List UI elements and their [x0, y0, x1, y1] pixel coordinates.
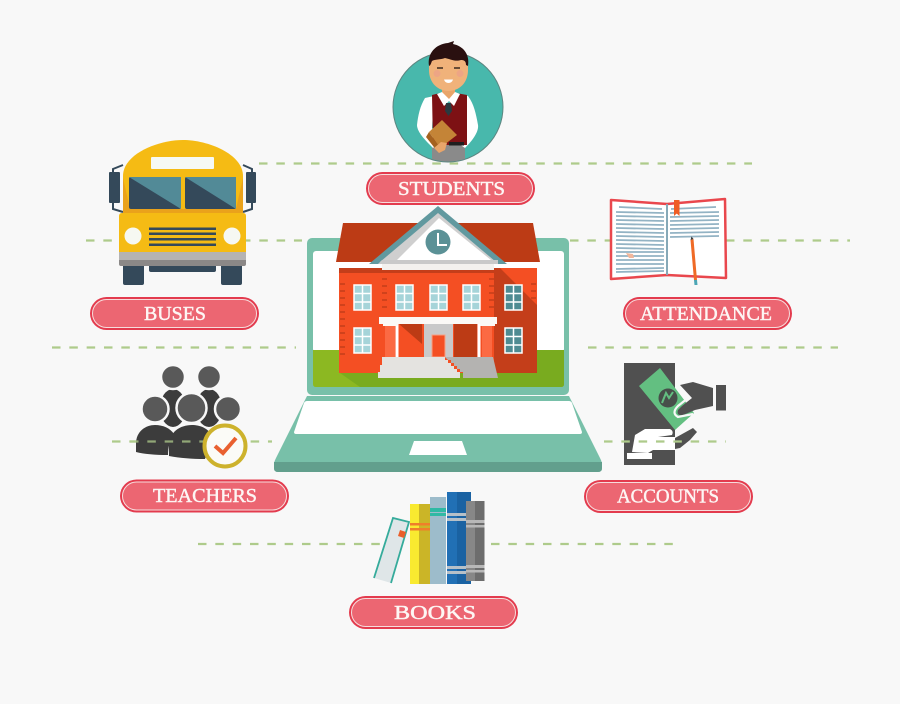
wheels	[123, 262, 242, 285]
lower hand	[632, 429, 675, 453]
pill: accounts	[584, 480, 753, 513]
face	[429, 58, 468, 91]
icon: teachers group	[130, 365, 246, 466]
pill: attendance: ATTENDANCE	[640, 303, 772, 325]
portico	[379, 317, 497, 357]
pencil	[690, 239, 697, 280]
headlights	[124, 228, 142, 244]
laptop screen frame	[307, 238, 569, 395]
neck	[442, 85, 455, 100]
note emblem	[658, 388, 678, 408]
upper hand	[678, 382, 713, 415]
pediment	[369, 206, 507, 264]
side mirrors	[109, 165, 256, 212]
lower cuff	[627, 453, 652, 459]
check badge	[204, 426, 246, 466]
pill: buses: BUSES	[144, 303, 206, 325]
pill: students	[366, 172, 535, 205]
stairs	[378, 357, 460, 378]
pill: students: STUDENTS	[398, 178, 505, 200]
pill: teachers: TEACHERS	[153, 485, 257, 507]
cuff	[716, 385, 726, 410]
windscreens	[129, 177, 236, 209]
eyes	[437, 67, 460, 69]
dark panel	[624, 363, 675, 465]
grey book	[466, 501, 484, 581]
icon: student	[393, 41, 503, 162]
grille	[149, 228, 216, 246]
illustration: school building	[336, 206, 540, 378]
tie	[445, 103, 452, 116]
bumper	[119, 252, 246, 261]
centre body	[169, 425, 212, 459]
walls	[339, 268, 537, 373]
smile	[444, 80, 453, 83]
pill: accounts: ACCOUNTS	[617, 486, 719, 508]
laptop base	[274, 396, 602, 472]
pill: books: BOOKS	[394, 602, 476, 624]
upper body	[123, 140, 243, 216]
shirt collar	[437, 92, 460, 106]
pill: attendance	[623, 297, 792, 330]
heads	[142, 365, 241, 423]
held book	[429, 120, 457, 148]
open book pages	[611, 199, 726, 279]
keyboard	[294, 401, 582, 434]
light blue book	[430, 497, 446, 584]
red vest	[432, 93, 467, 145]
icon: accounts hand and money	[604, 363, 726, 465]
eraser smudge	[626, 253, 634, 258]
brick marks	[340, 279, 536, 354]
finger outline	[674, 398, 693, 417]
icon: stack of books	[374, 492, 484, 584]
spine	[666, 204, 668, 275]
cheeks	[434, 70, 440, 77]
left text lines	[616, 207, 664, 272]
trackpad	[409, 441, 467, 455]
icon: school bus	[109, 140, 256, 285]
bookmark	[674, 200, 680, 216]
lower hand fingers	[675, 428, 697, 449]
hair	[429, 41, 468, 66]
clock	[426, 230, 450, 254]
left body	[136, 425, 174, 455]
shirt sleeves	[417, 95, 478, 148]
back row bodies	[160, 389, 222, 427]
banknote	[639, 368, 694, 430]
blue book	[447, 492, 471, 584]
pill: teachers	[120, 480, 289, 512]
roof sign	[151, 157, 214, 169]
pill: books	[349, 596, 518, 629]
cornice	[382, 264, 494, 270]
right text lines	[670, 207, 719, 237]
icon: attendance book	[611, 199, 726, 285]
windows	[354, 285, 522, 353]
teal circle	[393, 52, 503, 162]
icon: laptop	[274, 238, 602, 472]
belt	[449, 142, 464, 146]
pill: buses	[90, 297, 259, 330]
roof	[336, 223, 540, 262]
screen white	[313, 251, 564, 352]
trousers	[432, 143, 465, 162]
hand	[434, 142, 447, 153]
yellow book	[410, 504, 430, 584]
leaning book	[374, 518, 409, 583]
screen grass	[313, 350, 564, 387]
lower body	[119, 213, 246, 253]
